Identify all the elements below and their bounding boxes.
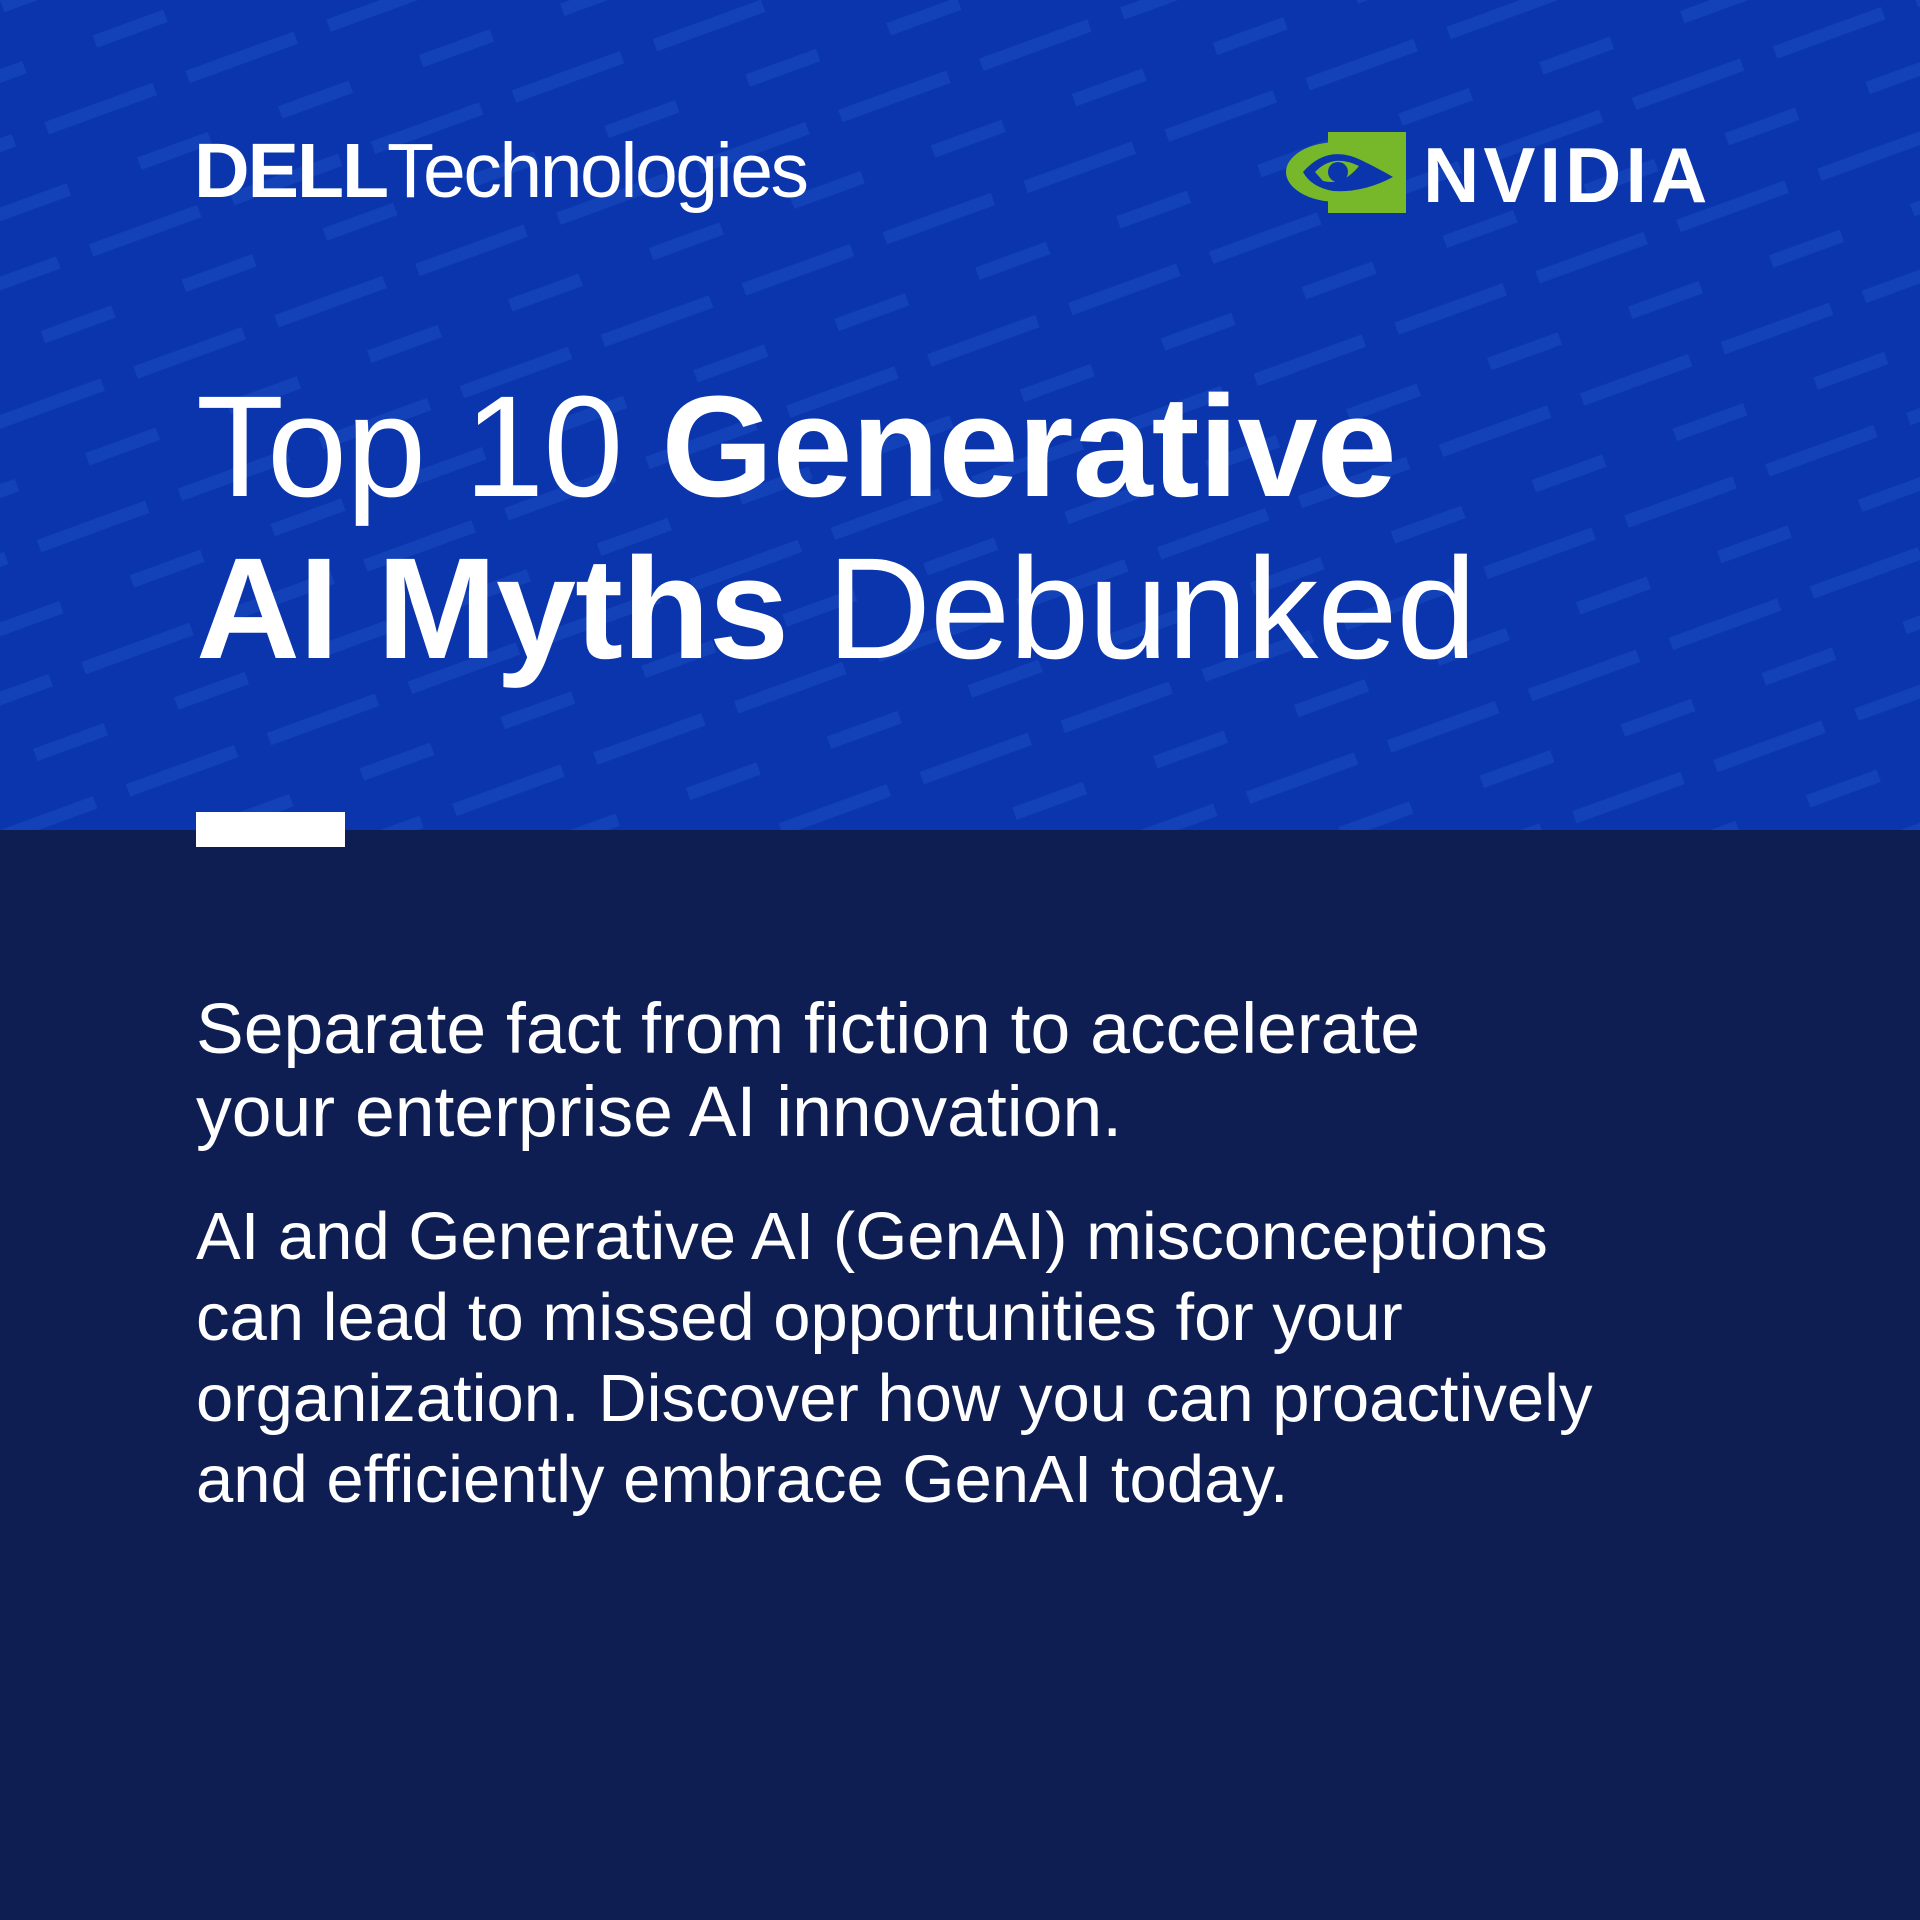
icon: nvidia eye	[1286, 132, 1406, 213]
title: AI Myths Debunked	[196, 528, 1476, 689]
title: Top 10 Generative	[196, 366, 1396, 527]
accent bar	[196, 812, 345, 847]
nvidia logo	[1286, 131, 1711, 219]
dell logo: DELLTechnologies	[194, 128, 807, 214]
body text: and efficiently embrace GenAI today.	[196, 1442, 1288, 1517]
title	[196, 366, 1476, 689]
body text: can lead to missed opportunities for your	[196, 1280, 1403, 1355]
subtitle: Separate fact from fiction to accelerate	[196, 989, 1420, 1069]
subtitle: your enterprise AI innovation.	[196, 1072, 1122, 1152]
header panel	[0, 0, 1920, 830]
subtitle	[196, 989, 1420, 1152]
body text: AI and Generative AI (GenAI) misconceptions	[196, 1199, 1548, 1274]
wordmark: NVIDIA	[1423, 131, 1711, 219]
body text: organization. Discover how you can proactively	[196, 1361, 1593, 1436]
body text	[196, 1199, 1593, 1517]
